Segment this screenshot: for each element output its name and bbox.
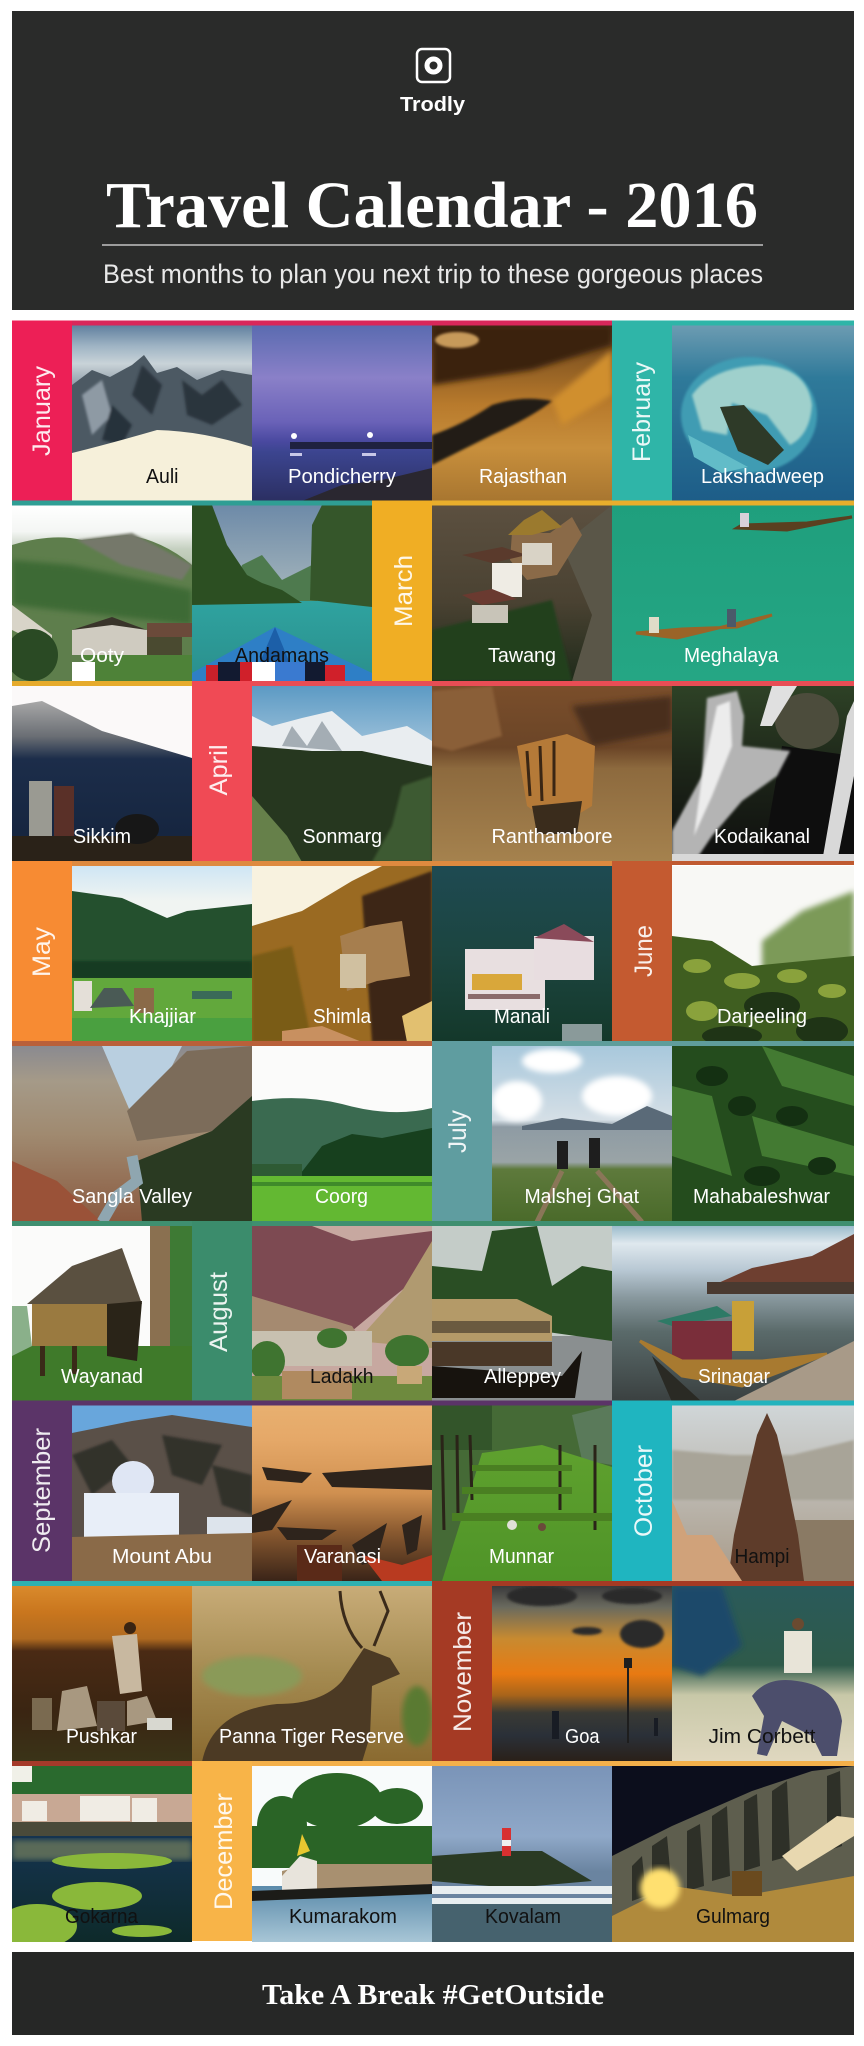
photo: Wayanad	[12, 1226, 192, 1400]
photo: Shimla	[252, 866, 432, 1041]
label: Sangla Valley: Sangla Valley	[72, 1186, 192, 1208]
footer banner	[12, 1952, 854, 2035]
photo: Auli	[72, 326, 252, 500]
photo: Ladakh	[252, 1226, 432, 1400]
month band: April: April	[205, 744, 233, 796]
label: Malshej Ghat: Malshej Ghat	[524, 1186, 639, 1208]
month band: February: February	[628, 362, 656, 462]
photo: Manali	[432, 866, 612, 1041]
label: Meghalaya: Meghalaya	[684, 645, 779, 667]
photo: Hampi	[672, 1406, 854, 1581]
label: Andamans: Andamans	[235, 645, 329, 667]
photo: Jim Corbett	[672, 1586, 854, 1761]
label: Sikkim: Sikkim	[73, 826, 131, 848]
label: Ranthambore: Ranthambore	[492, 826, 612, 848]
title: Travel Calendar - 2016	[106, 169, 758, 242]
photo: Gulmarg	[612, 1766, 854, 1942]
label: Manali: Manali	[494, 1006, 550, 1028]
photo: Pondicherry	[252, 326, 432, 500]
month band: January: January	[28, 366, 56, 456]
label: Varanasi: Varanasi	[304, 1546, 381, 1568]
label: Goa: Goa	[565, 1726, 600, 1748]
month band: November	[432, 1581, 492, 1761]
month band: August	[192, 1221, 252, 1400]
photo: Kovalam	[432, 1766, 612, 1942]
month band: March: March	[390, 555, 418, 627]
photo: Sikkim	[12, 701, 192, 861]
month band: May	[12, 861, 72, 1041]
month band: August: August	[205, 1272, 233, 1352]
month band: July	[432, 1041, 492, 1221]
photo: Kumarakom	[252, 1773, 432, 1942]
month band: September	[12, 1400, 72, 1581]
photo: Mount Abu	[72, 1406, 252, 1581]
icon: Trodly logo	[417, 49, 450, 82]
photo: Pushkar	[12, 1586, 192, 1761]
photo: Malshej Ghat	[492, 1046, 672, 1221]
label: Ladakh: Ladakh	[310, 1366, 374, 1388]
photo: Gokarna	[12, 1766, 192, 1942]
label: Kumarakom: Kumarakom	[289, 1906, 397, 1928]
month band: October: October	[630, 1445, 658, 1537]
photo: Lakshadweep	[672, 326, 854, 500]
month band: June: June	[630, 925, 658, 977]
label: Sonmarg: Sonmarg	[302, 826, 382, 848]
label: Darjeeling: Darjeeling	[717, 1006, 807, 1028]
month band: October	[612, 1400, 672, 1581]
month band: December: December	[210, 1793, 238, 1910]
month band: July: July	[444, 1110, 472, 1153]
photo: Ooty	[12, 524, 192, 681]
month band: February	[612, 320, 672, 500]
photo: Mahabaleshwar	[672, 1046, 854, 1221]
label: Tawang: Tawang	[488, 645, 556, 667]
label: Ooty: Ooty	[80, 645, 124, 667]
label: Gokarna: Gokarna	[65, 1906, 139, 1928]
photo: Sangla Valley	[12, 1046, 252, 1221]
month band: March	[372, 500, 432, 681]
label: Munnar: Munnar	[489, 1546, 554, 1568]
label: Pondicherry: Pondicherry	[288, 466, 396, 488]
month band: December	[192, 1761, 252, 1941]
label: Wayanad: Wayanad	[61, 1366, 143, 1388]
photo: Andamans	[192, 506, 372, 681]
photo: Rajasthan	[432, 326, 612, 500]
photo: Meghalaya	[612, 506, 854, 681]
month band: June	[612, 861, 672, 1041]
photo: Goa	[492, 1586, 672, 1761]
label: Mahabaleshwar: Mahabaleshwar	[693, 1186, 830, 1208]
label: Auli: Auli	[146, 466, 178, 488]
label: Panna Tiger Reserve: Panna Tiger Reserve	[219, 1726, 404, 1748]
month band: January	[12, 320, 72, 500]
label: Khajjiar: Khajjiar	[129, 1006, 196, 1028]
photo: Khajjiar	[72, 866, 252, 1041]
label: Hampi: Hampi	[734, 1546, 790, 1568]
photo: Munnar	[432, 1406, 612, 1581]
photo: Kodaikanal	[672, 686, 854, 861]
photo: Alleppey	[432, 1226, 612, 1400]
footer text: Take A Break #GetOutside	[262, 1979, 604, 2011]
brand name: Trodly	[400, 94, 466, 116]
label: Gulmarg: Gulmarg	[696, 1906, 770, 1928]
label: Kodaikanal: Kodaikanal	[714, 826, 810, 848]
photo: Coorg	[252, 1098, 432, 1221]
label: Coorg: Coorg	[315, 1186, 368, 1208]
photo: Ranthambore	[432, 686, 672, 861]
photo: Panna Tiger Reserve	[192, 1586, 432, 1761]
month band: May: May	[28, 926, 56, 977]
colour strips between rows	[12, 320, 854, 1766]
label: Mount Abu: Mount Abu	[112, 1546, 212, 1568]
label: Pushkar: Pushkar	[66, 1726, 137, 1748]
label: Kovalam: Kovalam	[485, 1906, 561, 1928]
label: Jim Corbett: Jim Corbett	[708, 1726, 816, 1748]
month band: April	[192, 681, 252, 861]
divider rule	[102, 244, 763, 246]
label: Alleppey: Alleppey	[484, 1366, 561, 1388]
month band: November: November	[449, 1612, 477, 1732]
photo: Tawang	[432, 506, 612, 681]
photo: Varanasi	[252, 1406, 432, 1581]
photo: Darjeeling	[672, 866, 854, 1041]
header panel	[12, 11, 854, 310]
photo: Sonmarg	[252, 686, 432, 861]
month band: September: September	[28, 1428, 56, 1553]
label: Rajasthan: Rajasthan	[479, 466, 567, 488]
label: Lakshadweep: Lakshadweep	[701, 466, 824, 488]
subtitle: Best months to plan you next trip to these gorgeous places	[103, 259, 763, 289]
label: Shimla: Shimla	[313, 1006, 372, 1028]
label: Srinagar: Srinagar	[698, 1366, 770, 1388]
photo: Srinagar	[612, 1226, 854, 1400]
